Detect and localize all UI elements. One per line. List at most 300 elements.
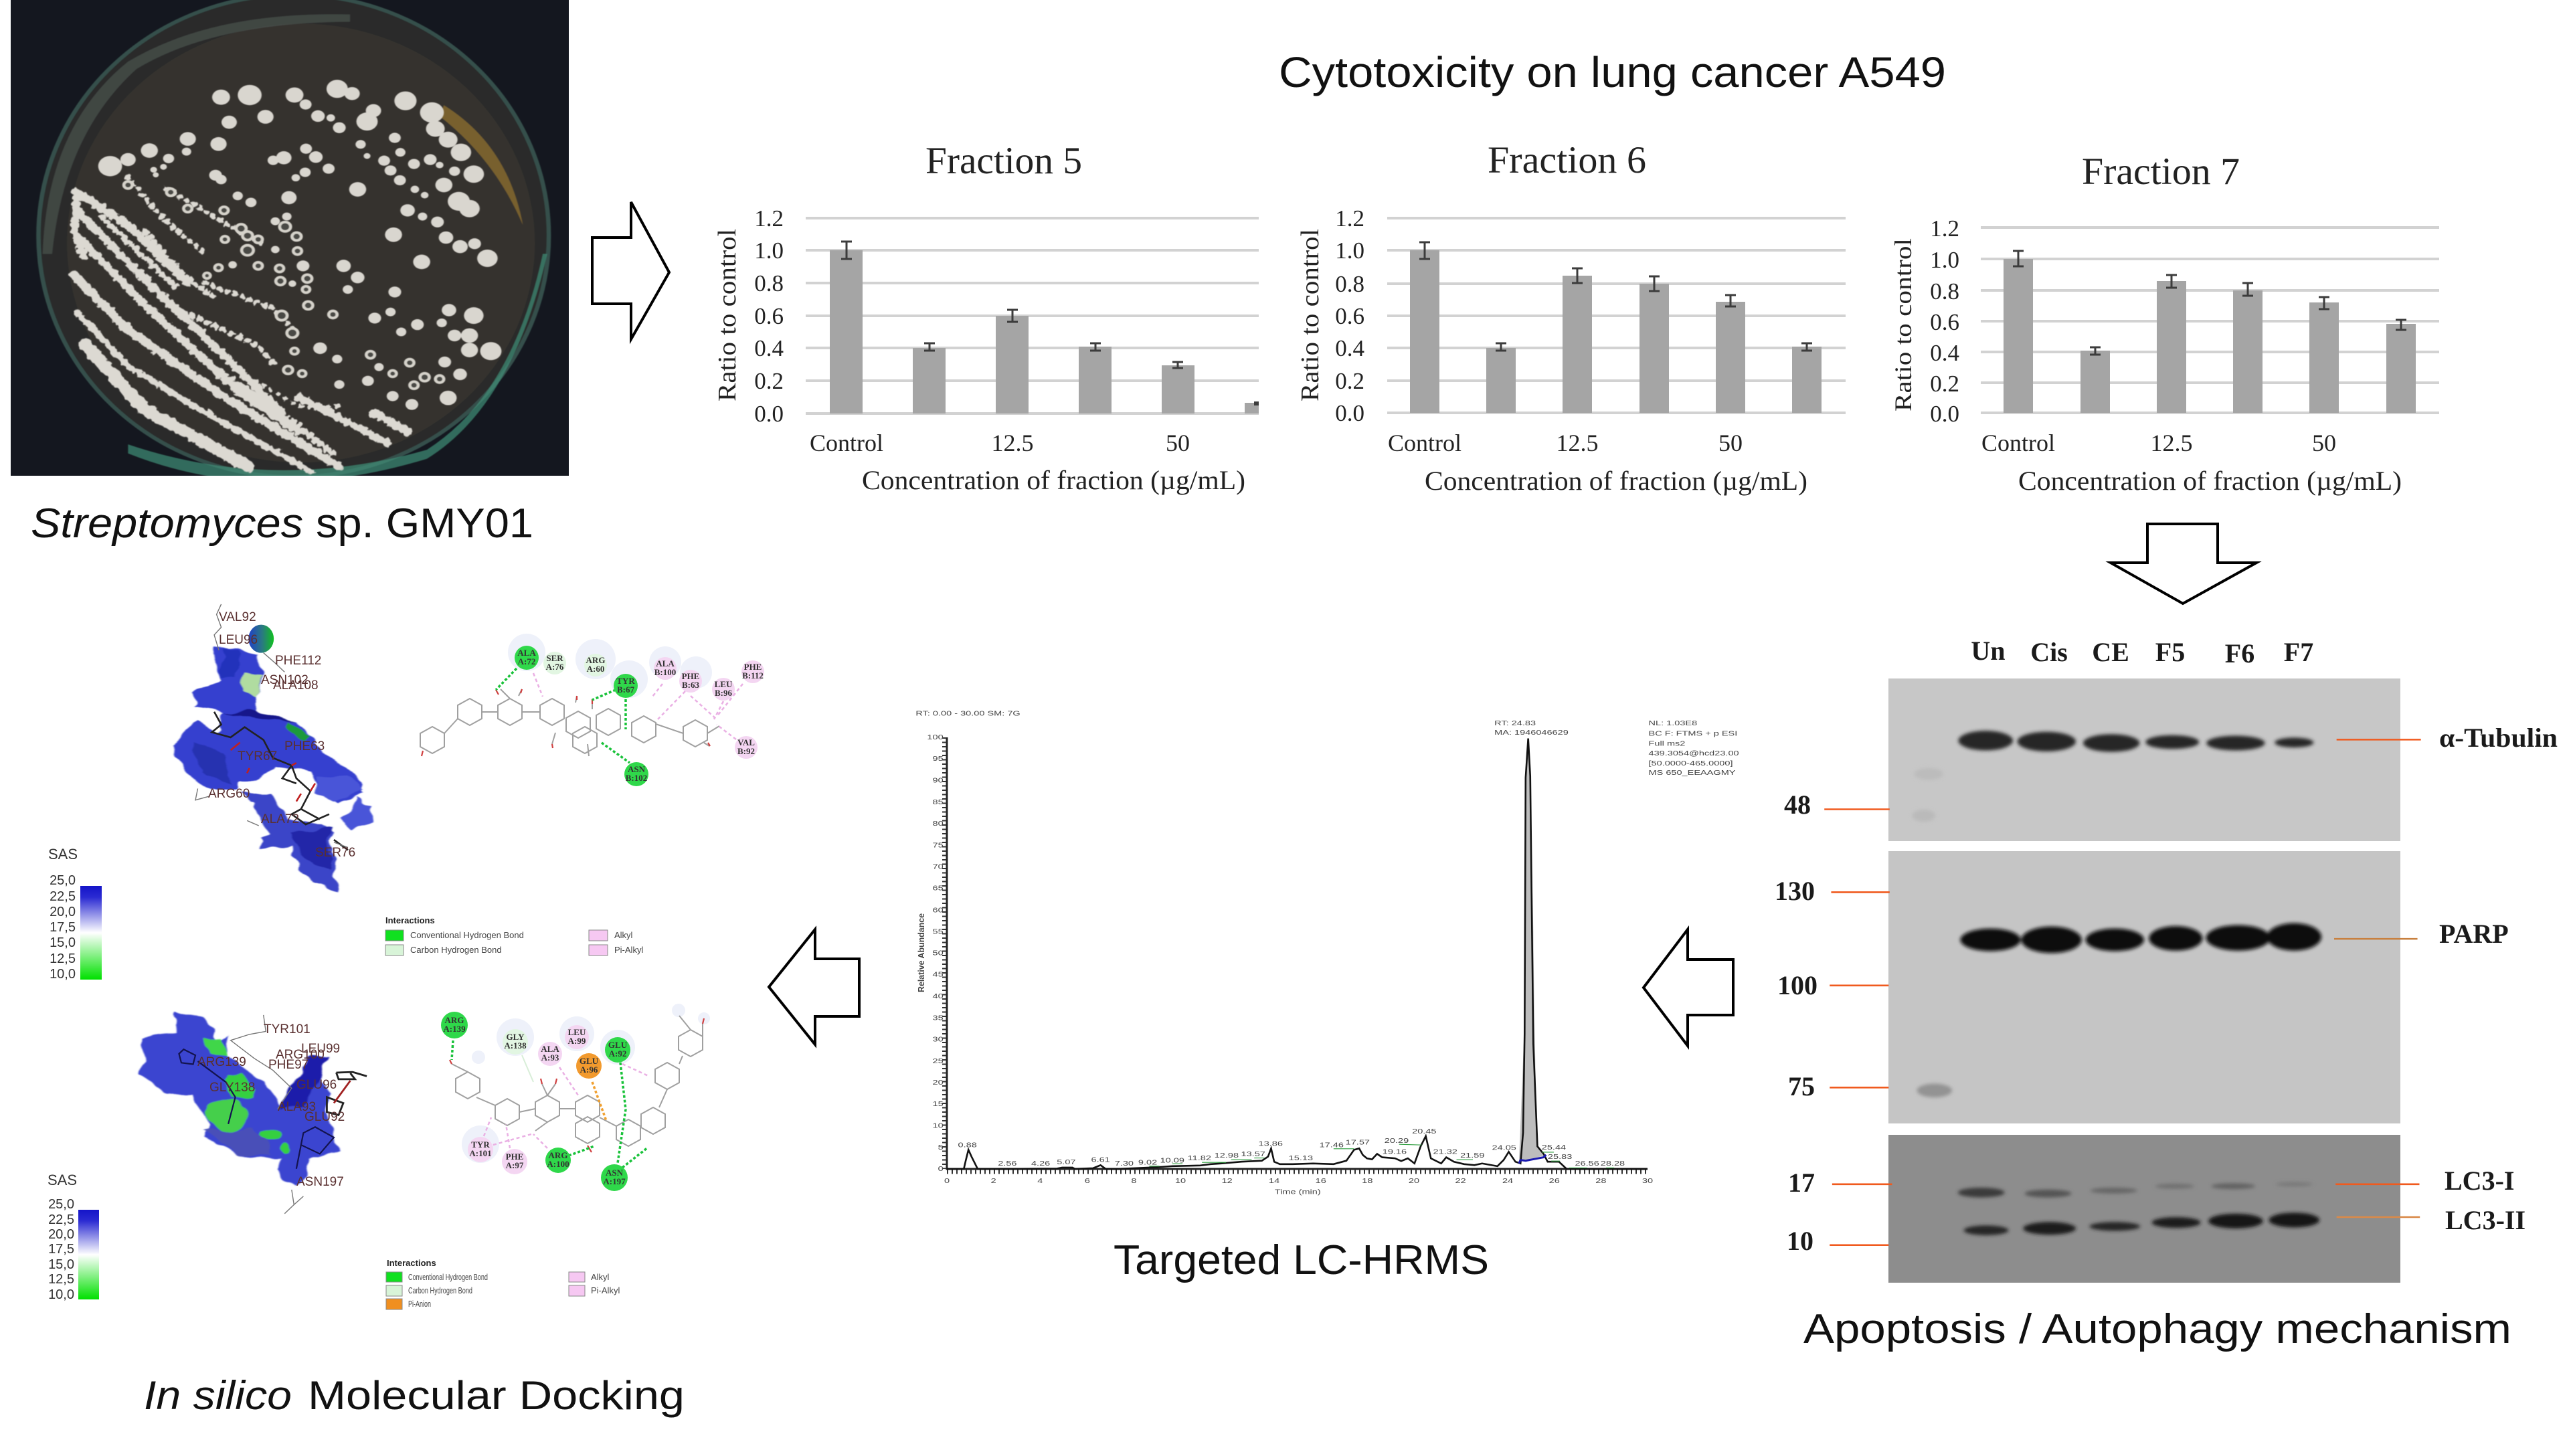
y axis labels: 0.2 <box>1930 371 1959 397</box>
lane labels: F5 <box>2155 637 2185 667</box>
chart: Fraction 5 <box>713 140 1259 495</box>
y axis labels <box>754 205 784 427</box>
y axis labels <box>1930 215 1959 427</box>
x axis labels: Control <box>810 430 883 456</box>
legend: SAS bottom: 20,0 <box>48 1227 74 1242</box>
panel: petri dish photo <box>11 0 569 482</box>
bars <box>1410 250 1822 413</box>
residue GLU A:96: GLU <box>580 1056 599 1066</box>
peak retention time labels: 24.05 <box>1492 1144 1516 1152</box>
peak retention time labels: 20.29 <box>1385 1138 1409 1145</box>
y axis numbers: 35 <box>933 1014 944 1022</box>
legend: SAS top: 17,5 <box>50 920 76 935</box>
y axis labels: 0.4 <box>1930 340 1959 366</box>
residue labels: LEU96 <box>219 633 258 647</box>
protein labels: PARP <box>2439 919 2509 949</box>
y axis numbers: 50 <box>933 949 944 957</box>
legend: interactions top: Carbon Hydrogen Bond <box>410 945 502 955</box>
residue LEU A:99 <box>565 1025 589 1049</box>
y axis numbers: 30 <box>933 1036 944 1043</box>
peak retention time labels: 21.59 <box>1460 1152 1485 1159</box>
y axis numbers: 40 <box>933 992 944 1000</box>
bars <box>2004 259 2416 413</box>
peak retention time labels: 13.86 <box>1259 1140 1283 1148</box>
ligand sticks <box>179 1049 334 1169</box>
x axis labels: 12.5 <box>2151 430 2192 456</box>
y axis numbers: 15 <box>933 1100 944 1107</box>
legend: SAS bottom: 10,0 <box>48 1287 74 1302</box>
legend: SAS bottom <box>48 1172 99 1302</box>
residue ASN A:197: ASN <box>606 1168 624 1178</box>
y axis labels: 0.0 <box>1930 401 1959 427</box>
peak retention time labels: 19.16 <box>1383 1148 1407 1156</box>
residue TYR B:67: B:67 <box>617 685 634 695</box>
bars <box>830 250 1259 414</box>
marker lines <box>1824 739 2421 1245</box>
y axis title: Ratio to control <box>1296 229 1324 401</box>
x axis numbers: 24 <box>1502 1177 1513 1184</box>
y axis numbers: 100 <box>927 733 944 741</box>
main peak annotation: MA: 1946046629 <box>1494 729 1569 736</box>
peak retention time labels: 4.26 <box>1031 1160 1050 1167</box>
residue ARG A:139: A:139 <box>443 1024 466 1034</box>
residue labels: ALA93 <box>278 1100 316 1114</box>
caption: in silico molecular docking <box>144 1373 685 1418</box>
residue labels: GLY138 <box>209 1081 255 1095</box>
residue TYR A:101: A:101 <box>469 1148 492 1158</box>
residue GLU A:92: GLU <box>608 1040 628 1050</box>
legend: SAS top <box>48 846 102 982</box>
y axis labels: 1.2 <box>1335 205 1364 232</box>
molecular weight labels: 48 <box>1784 790 1811 820</box>
y axis labels: 0.2 <box>754 368 784 394</box>
legend: SAS top: 10,0 <box>50 967 76 982</box>
molecular weight labels <box>1775 790 1818 1256</box>
peak retention time labels: 11.82 <box>1188 1155 1211 1162</box>
x axis numbers: 8 <box>1131 1177 1137 1184</box>
carbon hydrogen bond <box>522 1055 533 1082</box>
residue labels <box>208 610 355 860</box>
residue LEU A:99: LEU <box>568 1027 586 1037</box>
hydrogen bonds <box>452 1040 648 1168</box>
residue ALA B:100: ALA <box>656 658 675 668</box>
legend: SAS top: 22,5 <box>50 889 76 904</box>
caption: Streptomyces sp. GMY01 <box>31 500 533 547</box>
y axis numbers: 20 <box>933 1079 944 1086</box>
peak retention time labels: 25.44 <box>1542 1144 1566 1151</box>
legend: SAS bottom: 12,5 <box>48 1272 74 1287</box>
residue TYR B:67: TYR <box>616 676 635 686</box>
x axis title: Concentration of fraction (µg/mL) <box>1425 466 1807 496</box>
residue TYR B:67 <box>614 674 638 698</box>
residue labels: ARG100 <box>276 1048 325 1062</box>
lane labels: Un <box>1971 636 2006 666</box>
peak retention time labels: 13.57 <box>1241 1150 1265 1158</box>
legend: interactions bottom: Pi-Alkyl <box>591 1285 620 1295</box>
legend: SAS top: 25,0 <box>50 873 76 888</box>
peak retention time labels: 21.32 <box>1433 1148 1457 1156</box>
residue labels: LEU99 <box>301 1042 340 1056</box>
integration baseline <box>1519 1155 1546 1164</box>
y axis title: Ratio to control <box>713 229 741 401</box>
residue GLY A:138: GLY <box>507 1032 525 1042</box>
residue labels: TYR67 <box>238 749 277 763</box>
legend: interactions bottom: Carbon Hydrogen Bond <box>408 1285 472 1295</box>
residue PHE A:97: PHE <box>506 1152 523 1162</box>
caption: Streptomyces sp. GMY01: Streptomyces <box>31 500 303 547</box>
axis lines and ticks <box>944 737 1648 1172</box>
legend: interactions bottom: Alkyl <box>591 1272 610 1282</box>
molecular weight labels: 17 <box>1788 1168 1815 1198</box>
y axis numbers: 0 <box>938 1165 944 1172</box>
x axis numbers: 4 <box>1037 1177 1043 1184</box>
caption: targeted LC-HRMS: Targeted LC-HRMS <box>1114 1237 1489 1283</box>
error bars <box>2013 251 2406 355</box>
scan filter: Full ms2 <box>1649 740 1686 747</box>
residue PHE A:97 <box>502 1149 527 1174</box>
x axis numbers: 0 <box>944 1177 950 1184</box>
blot: LC3 <box>1888 1135 2400 1283</box>
x axis labels: 12.5 <box>992 430 1033 456</box>
legend: SAS bottom: 25,0 <box>48 1197 74 1212</box>
residue labels: TYR101 <box>264 1022 311 1036</box>
ligand sticks <box>212 712 348 850</box>
residue labels: GLU96 <box>296 1078 337 1092</box>
residue ALA A:72: A:72 <box>518 656 535 666</box>
residue labels: VAL92 <box>219 610 256 624</box>
x axis title: Concentration of fraction (µg/mL) <box>862 465 1245 495</box>
scan filter: BC F: FTMS + p ESI <box>1649 730 1737 737</box>
legend: interactions top: Interactions <box>385 915 435 925</box>
chart title: Fraction 5 <box>925 140 1082 182</box>
peak retention time labels: 25.83 <box>1548 1154 1572 1160</box>
legend: SAS bottom: 15,0 <box>48 1257 74 1272</box>
legend: interactions top: Pi-Alkyl <box>614 945 643 955</box>
residue ARG A:139 <box>441 1012 468 1038</box>
caption: in silico molecular docking: In silico <box>144 1373 292 1418</box>
y axis labels: 0.6 <box>754 303 784 329</box>
residue labels: SER76 <box>315 846 355 860</box>
y axis labels: 0.8 <box>1930 278 1959 304</box>
residue ASN B:102: ASN <box>628 764 646 774</box>
scan filter: NL: 1.03E8 <box>1649 720 1697 727</box>
x axis labels: 50 <box>1166 430 1190 456</box>
ligand skeleton <box>452 1016 703 1146</box>
lane labels: F6 <box>2225 638 2254 668</box>
residue PHE B:112: PHE <box>744 662 762 672</box>
residue ALA B:100 <box>654 657 677 680</box>
y axis labels: 0.0 <box>754 401 784 427</box>
residue PHE B:112 <box>741 660 764 683</box>
y axis labels: 0.8 <box>754 270 784 296</box>
x axis numbers: 28 <box>1595 1177 1607 1184</box>
caption: in silico molecular docking: Molecular Docking <box>308 1373 685 1418</box>
y axis labels: 0.8 <box>1335 271 1364 297</box>
residue ARG A:60: ARG <box>586 655 605 665</box>
y axis numbers: 75 <box>933 842 944 849</box>
arrow: LC-HRMS to docking <box>769 929 859 1044</box>
scan filter <box>1649 720 1739 777</box>
icon: green surface sphere <box>248 625 274 653</box>
peak retention time labels: 2.56 <box>998 1160 1017 1167</box>
scan filter: [50.0000-465.0000] <box>1649 759 1733 767</box>
y axis labels: 0.4 <box>754 335 784 361</box>
y axis numbers: 70 <box>933 863 944 871</box>
residue PHE B:63: PHE <box>682 671 699 681</box>
pi-anion bond <box>592 1082 606 1121</box>
residue labels: PHE63 <box>284 739 325 753</box>
x axis numbers: 6 <box>1085 1177 1090 1184</box>
arrow: western blot to LC-HRMS <box>1644 929 1733 1046</box>
peak retention time labels: 17.57 <box>1346 1139 1370 1146</box>
y axis labels: 0.6 <box>1335 303 1364 329</box>
x axis numbers: 18 <box>1362 1177 1373 1184</box>
blot: PARP <box>1888 851 2400 1123</box>
residues <box>441 1012 630 1191</box>
chart: Fraction 6 <box>1296 139 1846 496</box>
caption: apoptosis / autophagy mechanism: Apoptosis / Autophagy mechanism <box>1803 1306 2511 1352</box>
residue labels: ALA108 <box>273 678 319 693</box>
y axis labels: 1.0 <box>754 238 784 264</box>
residue ASN A:197 <box>601 1164 628 1191</box>
panel: 2D interaction diagram, top <box>420 634 764 786</box>
panel: western blot <box>1775 636 2558 1283</box>
residue GLU A:92 <box>605 1037 630 1063</box>
peak retention time labels <box>958 1127 1625 1167</box>
y axis labels: 1.2 <box>754 205 784 232</box>
x axis labels <box>1981 430 2336 456</box>
legend: SAS bottom: 17,5 <box>48 1242 74 1257</box>
residue PHE B:63: B:63 <box>682 680 700 690</box>
chart: LC-HRMS chromatogram <box>915 710 1739 1196</box>
error bars <box>1419 242 1812 351</box>
y axis numbers: 90 <box>933 777 944 784</box>
y axis labels: 0.0 <box>1335 400 1364 426</box>
thin residue sticks <box>231 1015 303 1214</box>
y axis numbers: 85 <box>933 798 944 806</box>
residue LEU B:96: B:96 <box>715 688 732 698</box>
molecular weight labels: 10 <box>1787 1226 1813 1256</box>
residue ALA A:93: A:93 <box>541 1053 559 1063</box>
x axis labels: 50 <box>2312 430 2336 456</box>
alkyl interactions <box>484 1064 648 1148</box>
residue ARG A:100: A:100 <box>547 1159 569 1169</box>
x axis numbers: 30 <box>1642 1177 1653 1184</box>
peak retention time labels: 12.98 <box>1215 1152 1239 1159</box>
error bars <box>841 242 1183 368</box>
molecular weight labels: 75 <box>1788 1071 1815 1101</box>
axis title: relative abundance: Relative Abundance <box>916 913 926 992</box>
residue ARG A:60 <box>584 654 607 676</box>
x axis numbers: 10 <box>1175 1177 1186 1184</box>
protein labels: LC3-II <box>2445 1205 2525 1235</box>
lane labels: CE <box>2092 637 2129 667</box>
residue PHE B:63 <box>679 670 702 693</box>
legend: interactions bottom <box>386 1258 620 1309</box>
residue TYR A:101 <box>468 1137 493 1162</box>
residue labels: GLU92 <box>304 1110 345 1124</box>
peak retention time labels: 6.61 <box>1091 1156 1110 1164</box>
legend: SAS top: 15,0 <box>50 935 76 950</box>
y axis labels: 1.0 <box>1335 238 1364 264</box>
residue ASN A:197: A:197 <box>603 1176 626 1186</box>
bands <box>1912 731 2321 1235</box>
blot: alpha-tubulin <box>1888 678 2400 841</box>
legend: interactions top: Conventional Hydrogen Bond <box>410 930 524 940</box>
y axis labels: 1.0 <box>1930 247 1959 273</box>
main peak annotation <box>1494 720 1569 736</box>
hydrogen bonds <box>496 668 630 763</box>
peak retention time labels: 7.30 <box>1115 1160 1134 1167</box>
peak retention time labels: 10.09 <box>1160 1157 1184 1164</box>
peak retention time labels: 5.07 <box>1057 1158 1076 1166</box>
residue GLY A:138 <box>503 1029 528 1055</box>
residue ALA A:93 <box>538 1042 562 1066</box>
residue ALA B:100: B:100 <box>654 667 676 677</box>
legend: interactions top: Alkyl <box>614 930 633 940</box>
residues <box>515 646 764 786</box>
y axis title: Ratio to control <box>1890 238 1917 412</box>
protein labels <box>2439 723 2558 1235</box>
panel: 2D interaction diagram, bottom <box>441 1004 710 1191</box>
chart: Fraction 7 <box>1890 151 2439 496</box>
chromatogram trace <box>947 739 1648 1169</box>
x axis numbers <box>944 1177 1653 1196</box>
peak area <box>1519 739 1544 1162</box>
peak retention time labels: 0.88 <box>958 1142 977 1149</box>
x axis labels: Control <box>1981 430 2055 456</box>
scan filter: MS 650_EEAAGMY <box>1649 769 1735 777</box>
panel: docking surface, bottom complex <box>141 1012 367 1214</box>
x axis labels: 50 <box>1718 430 1743 456</box>
residue PHE A:97: A:97 <box>506 1160 524 1170</box>
x axis numbers: 20 <box>1409 1177 1419 1184</box>
peak retention time labels: 15.13 <box>1289 1155 1313 1162</box>
residue halos <box>462 1004 710 1163</box>
scan filter: 439.3054@hcd23.00 <box>1649 749 1739 757</box>
x axis numbers: 14 <box>1269 1177 1279 1184</box>
legend: interactions bottom: Conventional Hydrogen Bond <box>408 1272 488 1282</box>
y axis numbers: 60 <box>933 907 944 914</box>
y axis numbers: 80 <box>933 820 944 828</box>
legend: interactions top <box>385 915 643 955</box>
streaks of confluent growth <box>75 178 410 472</box>
residue halos <box>508 634 712 698</box>
residue ARG A:60: A:60 <box>587 664 604 674</box>
run header: RT: 0.00 - 30.00 SM: 7G <box>915 710 1021 717</box>
y axis labels <box>1335 205 1364 426</box>
thin residue sticks <box>195 604 348 848</box>
residue labels: ARG139 <box>197 1055 246 1069</box>
residue GLY A:138: A:138 <box>504 1040 527 1051</box>
panel: docking surface, top complex <box>169 604 374 891</box>
residue GLU A:96: A:96 <box>580 1065 598 1075</box>
residue SER A:76 <box>543 652 566 674</box>
lane labels: F7 <box>2284 637 2313 667</box>
residue SER A:76: A:76 <box>546 662 564 672</box>
y axis numbers: 45 <box>933 971 944 978</box>
residue ASN B:102 <box>624 762 648 786</box>
peak retention time labels: 9.02 <box>1138 1159 1157 1166</box>
x axis labels <box>810 430 1190 456</box>
residue labels: ARG60 <box>208 787 250 801</box>
peak retention time labels: 28.28 <box>1601 1160 1625 1167</box>
residue labels: PHE97 <box>268 1058 308 1072</box>
molecular weight labels: 100 <box>1777 970 1818 1000</box>
legend: SAS top: 12,5 <box>50 951 76 966</box>
legend: interactions bottom: Pi-Anion <box>408 1299 431 1309</box>
x axis labels: 12.5 <box>1557 430 1598 456</box>
y axis numbers: 55 <box>933 928 944 935</box>
residue labels <box>197 1022 345 1189</box>
residue labels: ASN197 <box>296 1175 344 1189</box>
x axis numbers: 26 <box>1549 1177 1560 1184</box>
icon: glass dish rim <box>38 0 549 477</box>
x axis numbers: 12 <box>1222 1177 1233 1184</box>
icon: agar surface <box>67 23 535 462</box>
y axis labels: 0.2 <box>1335 368 1364 394</box>
arrow: petri dish to cytotoxicity <box>592 202 669 339</box>
ligand skeleton <box>420 689 719 756</box>
residue LEU A:99: A:99 <box>568 1036 586 1046</box>
alkyl interactions <box>533 673 743 739</box>
y axis numbers: 95 <box>933 755 944 763</box>
chart title: Fraction 6 <box>1488 139 1646 181</box>
molecular weight labels: 130 <box>1775 876 1815 906</box>
residue labels: ALA72 <box>261 812 299 826</box>
y axis numbers: 25 <box>933 1057 944 1065</box>
legend: SAS top: SAS <box>48 846 78 862</box>
residue PHE B:112: B:112 <box>742 670 764 680</box>
arrow: cytotoxicity to western blot <box>2111 524 2256 604</box>
lane labels: Cis <box>2030 637 2068 667</box>
protein labels: LC3-I <box>2445 1166 2514 1196</box>
residue GLU A:92: A:92 <box>609 1049 626 1059</box>
residue labels: PHE112 <box>275 654 321 668</box>
x axis labels <box>1388 430 1743 456</box>
main peak annotation: RT: 24.83 <box>1494 720 1536 727</box>
binding pocket surface <box>141 1012 339 1187</box>
legend: SAS top: 20,0 <box>50 905 76 919</box>
green peak markers <box>1149 1144 1614 1168</box>
residue ARG A:139: ARG <box>445 1015 464 1025</box>
protein labels: α-Tubulin <box>2439 723 2558 753</box>
chart title: Fraction 7 <box>2082 151 2240 193</box>
title: cytotoxicity: Cytotoxicity on lung cancer A549 <box>1279 48 1946 96</box>
x axis numbers: 22 <box>1455 1177 1466 1184</box>
peak retention time labels: 17.46 <box>1320 1142 1344 1149</box>
residue LEU B:96 <box>712 678 735 701</box>
residue SER A:76: SER <box>546 653 563 663</box>
residue GLU A:96 <box>576 1053 602 1079</box>
y axis numbers: 5 <box>938 1144 944 1151</box>
lane labels <box>1971 636 2313 668</box>
y axis labels: 0.6 <box>1930 309 1959 335</box>
caption: Streptomyces sp. GMY01: sp. GMY01 <box>316 500 533 547</box>
legend: SAS bottom: SAS <box>48 1172 77 1188</box>
colonies with ring morphology <box>124 181 444 389</box>
binding pocket surface <box>169 646 374 891</box>
peak retention time labels: 20.45 <box>1412 1127 1437 1135</box>
residue ASN B:102: B:102 <box>626 773 647 783</box>
legend: interactions bottom: Interactions <box>387 1258 436 1268</box>
residue ALA A:93: ALA <box>541 1044 559 1054</box>
residue TYR A:101: TYR <box>471 1140 490 1150</box>
x axis numbers: 16 <box>1316 1177 1326 1184</box>
x axis numbers: Time (min) <box>1275 1188 1321 1196</box>
residue LEU B:96: LEU <box>715 679 733 689</box>
y axis numbers: 10 <box>933 1122 944 1129</box>
